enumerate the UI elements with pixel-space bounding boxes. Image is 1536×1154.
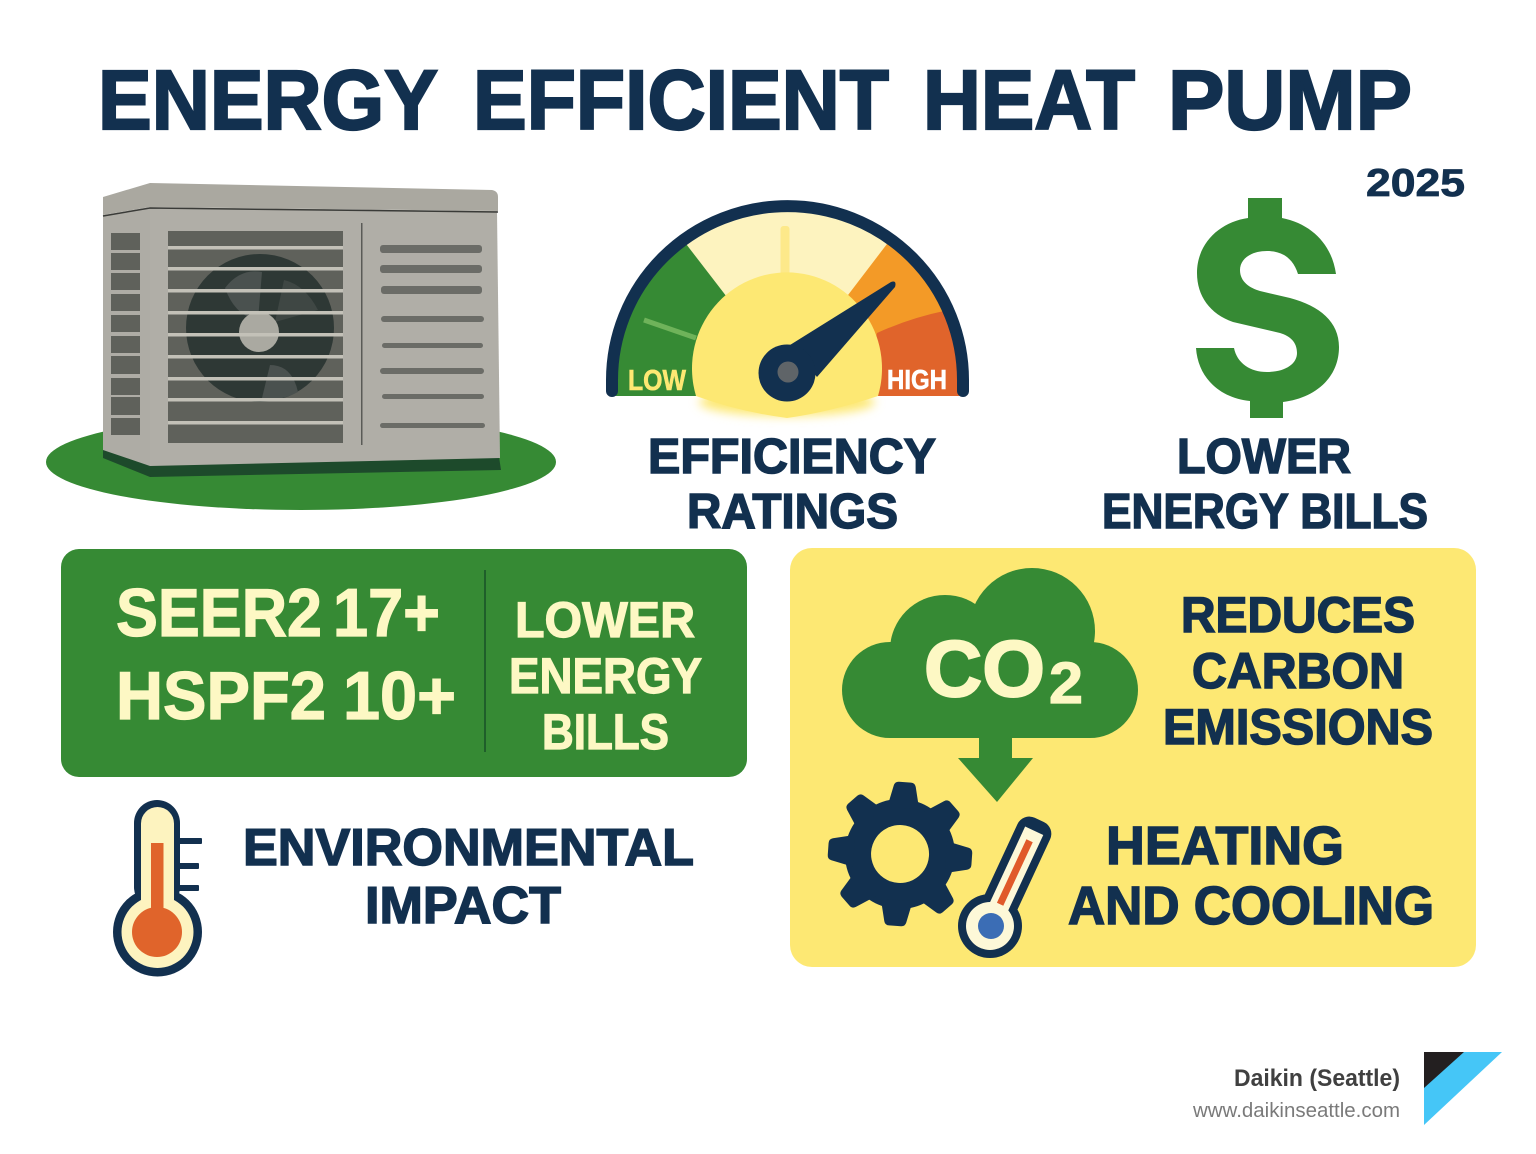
- heading: environmental impact: [243, 819, 694, 935]
- gauge ticks: [780, 226, 790, 282]
- gauge segments: [615, 212, 960, 396]
- heading: lower energy bills: ENERGY BILLS: [1102, 485, 1428, 539]
- illustration: heat pump outdoor unit: [46, 183, 556, 510]
- label: CO2: 2: [1049, 651, 1083, 716]
- footer: logo mark: [1424, 1052, 1502, 1125]
- heading: environmental impact: ENVIRONMENTAL: [243, 819, 694, 877]
- rating: SEER2: [116, 575, 440, 651]
- text: lower energy bills: ENERGY: [509, 648, 702, 704]
- rating: SEER2: SEER2: [116, 575, 322, 651]
- text: reduces carbon emissions: CARBON: [1192, 643, 1404, 699]
- title: PUMP: [1168, 53, 1412, 147]
- unit top lid: [103, 183, 498, 215]
- footer: brand name and URL: Daikin (Seattle): [1234, 1065, 1400, 1092]
- label: low: LOW: [628, 365, 687, 397]
- text: reduces carbon emissions: EMISSIONS: [1163, 699, 1433, 755]
- right louvers: [380, 245, 485, 428]
- green ground ellipse: [46, 414, 556, 510]
- fan hub: [239, 312, 279, 352]
- title: ENERGY: [98, 53, 438, 147]
- unit base shadow: [103, 448, 501, 477]
- icon: CO2 cloud with down arrow: [842, 568, 1138, 802]
- gauge centre dial: [692, 272, 882, 418]
- panel: ratings (green): [61, 549, 747, 777]
- text: heating and cooling: [1068, 816, 1434, 936]
- heading: efficiency ratings: RATINGS: [687, 485, 898, 539]
- label: high: HIGH: [887, 364, 947, 395]
- text: lower energy bills: [509, 592, 702, 760]
- heading: environmental impact: IMPACT: [365, 877, 561, 935]
- gauge needle: [758, 282, 896, 402]
- side vents: [111, 233, 140, 435]
- footer: brand name and URL: www.daikinseattle.com: [1192, 1100, 1400, 1122]
- title: HEAT: [923, 53, 1135, 147]
- text: heating and cooling: HEATING: [1106, 816, 1344, 876]
- text: reduces carbon emissions: [1163, 587, 1433, 755]
- rating: HSPF2: [116, 658, 456, 734]
- fan grille: [168, 231, 343, 443]
- title: [98, 53, 1412, 147]
- gauge outer ring: [612, 206, 963, 391]
- icon: gear: [823, 777, 977, 931]
- panel: benefits (yellow): [790, 548, 1476, 967]
- text: lower energy bills: BILLS: [542, 704, 669, 760]
- heading: efficiency ratings: EFFICIENCY: [648, 430, 936, 484]
- unit side panel: [103, 207, 150, 466]
- title: EFFICIENT: [473, 53, 889, 147]
- fan: [186, 254, 334, 402]
- panel divider: [361, 223, 362, 445]
- text: heating and cooling: AND COOLING: [1068, 876, 1434, 936]
- icon: tilted thermometer: [958, 812, 1056, 958]
- rating: HSPF2: 10+: [343, 658, 456, 734]
- icon: thermometer: [113, 800, 202, 976]
- rating: HSPF2: HSPF2: [116, 658, 326, 734]
- year label: 2025: [1366, 162, 1465, 205]
- gauge glow: [699, 388, 875, 416]
- unit front panel: [150, 207, 500, 466]
- text: reduces carbon emissions: REDUCES: [1181, 587, 1415, 643]
- rating: SEER2: 17+: [333, 575, 440, 651]
- heading: lower energy bills: LOWER: [1177, 430, 1351, 484]
- heading: efficiency ratings: [648, 430, 936, 539]
- heading: lower energy bills: [1102, 430, 1428, 539]
- icon: dollar sign: [1196, 198, 1339, 418]
- label: CO2: CO: [924, 624, 1045, 713]
- icon: efficiency gauge: [600, 200, 980, 418]
- text: lower energy bills: LOWER: [515, 592, 695, 648]
- footer: brand name and URL: [1192, 1065, 1400, 1122]
